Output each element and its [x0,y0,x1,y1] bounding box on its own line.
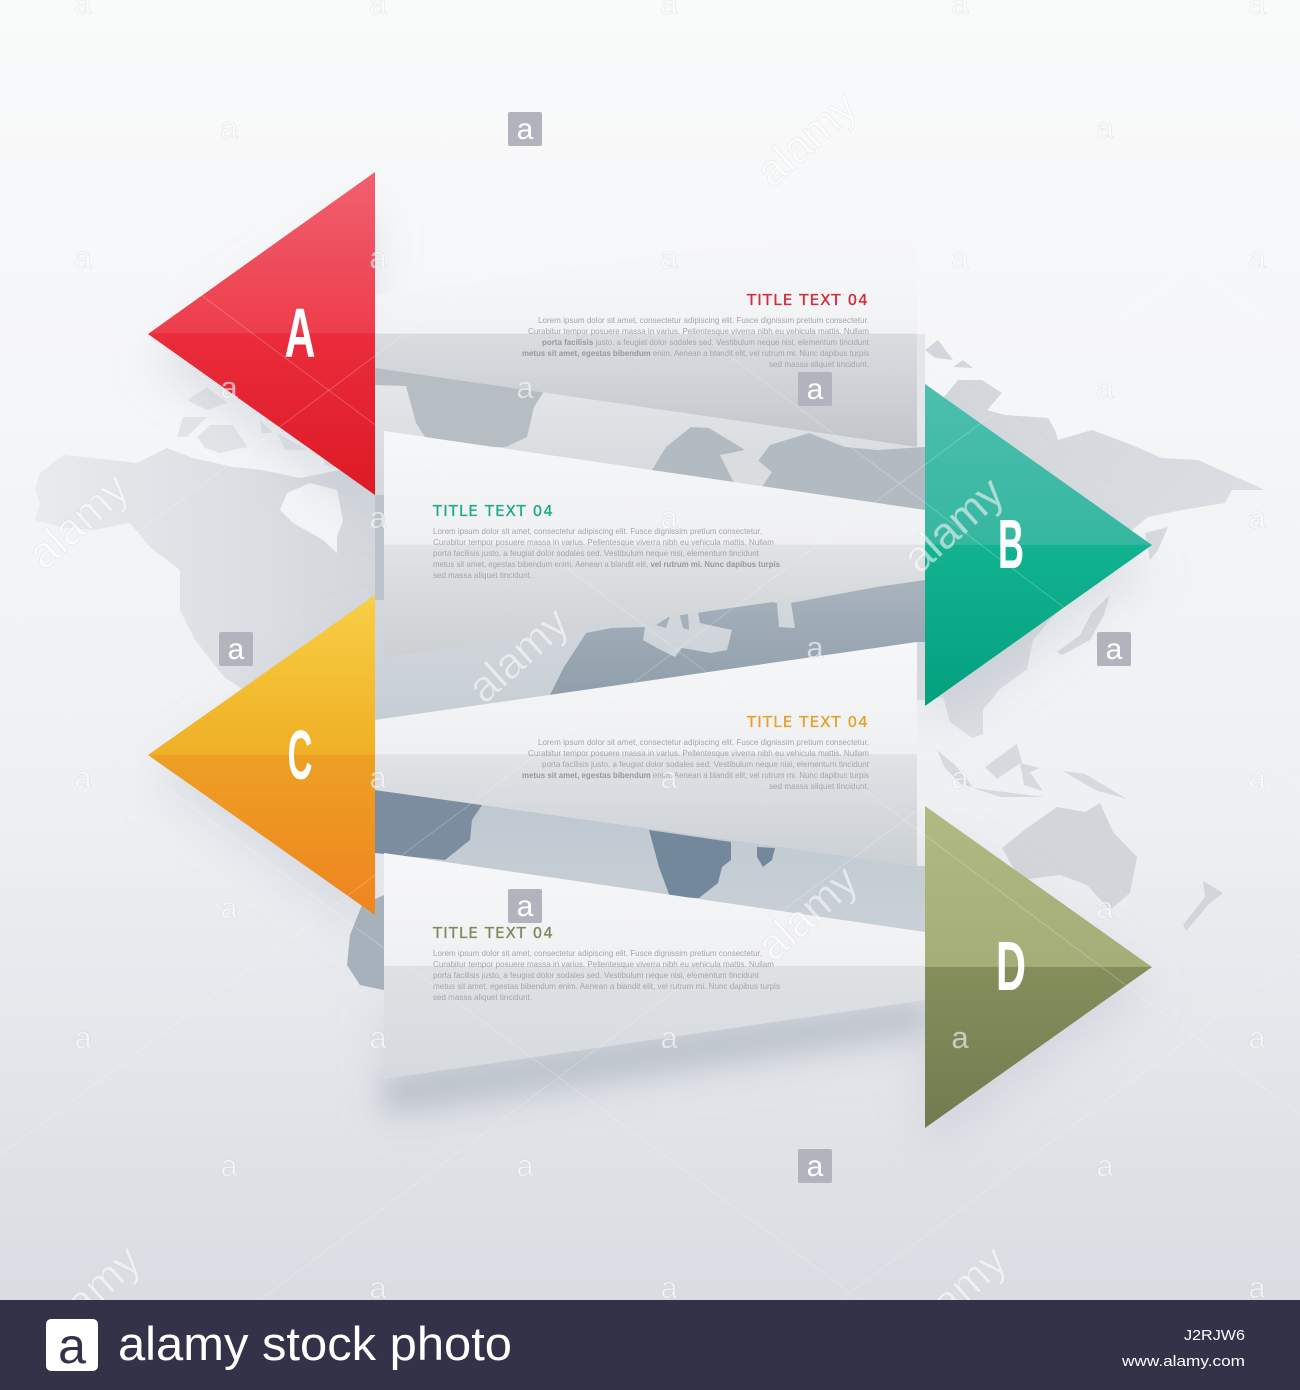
continent: Australia [1002,803,1223,931]
footer logo [46,1318,98,1374]
watermark lattice: a [807,373,824,406]
watermark lattice: alamy [458,598,578,713]
panel: C text banner [375,642,917,866]
arrow C [148,595,375,915]
body text C: Lorem ipsum dolor sit amet, consectetur adipiscing elit. Fusce dignissim pretium consectetur. [538,737,869,747]
title D: TITLE TEXT 04 [432,924,554,942]
watermark lattice: a [516,1148,534,1183]
body text C: metus sit amet, egestas bibendum enim. Aenean a blandit elit, vel rutrum mi. Nunc dapibus turpis [522,770,869,780]
watermark lattice: a [369,760,387,795]
watermark lattice: a [220,110,238,145]
watermark lattice: a [951,240,969,275]
arrow B: B [998,505,1024,583]
watermark lattice: alamy [893,468,1013,583]
watermark lattice: a [660,500,678,535]
watermark lattice: a [220,370,238,405]
footer bar [0,1300,1300,1390]
arrow A: A [284,294,316,372]
body text A: Lorem ipsum dolor sit amet, consectetur adipiscing elit. Fusce dignissim pretium consectetur. [538,315,869,325]
body text B: porta facilisis justo, a feugiat dolor sodales sed. Vestibulum neque nisi, elementum tincidunt [433,548,760,558]
title B: TITLE TEXT 04 [432,502,554,520]
watermark lattice: a [951,760,969,795]
watermark lattice: a [517,890,534,923]
panel: D text banner [384,853,925,1079]
footer brand name: alamy stock photo [118,1317,512,1370]
watermark lattice: a [1096,1148,1114,1183]
panel: A text banner [375,220,917,447]
watermark lattice: a [1248,1270,1266,1305]
watermark lattice: alamy [896,1236,1016,1351]
body text D: Lorem ipsum dolor sit amet, consectetur adipiscing elit. Fusce dignissim pretium consectetur. [433,948,762,958]
watermark lattice: a [660,240,678,275]
watermark lattice: alamy [746,82,866,197]
watermark lattice: a [220,890,238,925]
body text B: metus sit amet, egestas bibendum enim. Aenean a blandit elit, vel rutrum mi. Nunc dapibus turpis [433,559,780,569]
body text D [433,948,780,1002]
body text D: porta facilisis justo, a feugiat dolor sodales sed. Vestibulum neque nisi, elementum tincidunt [433,970,760,980]
body text D: metus sit amet, egestas bibendum enim. Aenean a blandit elit, vel rutrum mi. Nunc dapibus turpis [433,981,780,991]
body text C: sed massa aliquet tincidunt. [769,781,869,791]
watermark lattice: alamy [18,464,138,579]
body text A: Curabitur tempor posuere massa in varius. Pellentesque viverra nibh eu vehicula mattis. Nullam [528,326,869,336]
website: www.alamy.com [1121,1353,1245,1370]
watermark lattice: a [660,760,678,795]
watermark lattice: a [807,1150,824,1183]
watermark lattice: a [74,240,92,275]
watermark lattice: a [1248,240,1266,275]
watermark lattice: a [74,760,92,795]
watermark lattice: a [951,1020,969,1055]
watermark lattice: a [1248,1020,1266,1055]
body text A: porta facilisis justo, a feugiat dolor sodales sed. Vestibulum neque nisi, elementum tincidunt [542,337,870,347]
watermark lattice: a [806,630,824,665]
watermark lattice: alamy [747,856,867,971]
image id: J2RJW6 [1184,1327,1245,1344]
gaps between panels [375,334,925,1000]
panel: B text banner [384,431,925,658]
watermark lattice: a [660,1270,678,1305]
body text B: Curabitur tempor posuere massa in varius. Pellentesque viverra nibh eu vehicula mattis. Nullam [433,537,774,547]
arctic islands [177,387,375,475]
watermark lattice: a [1106,633,1123,666]
world map [35,340,1265,931]
body text A: sed massa aliquet tincidunt. [769,359,869,369]
watermark lattice: a [74,1020,92,1055]
body text C: porta facilisis justo, a feugiat dolor sodales sed. Vestibulum neque nisi, elementum tincidunt [542,759,870,769]
watermark lattice: a [369,1270,387,1305]
title A: TITLE TEXT 04 [746,291,869,309]
arrow A [148,172,375,495]
soft shadows behind panels and arrows [148,200,1152,1150]
map seen through the gaps [347,360,925,990]
arrow D [925,806,1152,1128]
watermark lattice: a [516,370,534,405]
body text C [522,737,870,791]
watermark lattice: a [369,240,387,275]
watermark lattice: a [1096,890,1114,925]
body text A: metus sit amet, egestas bibendum enim. Aenean a blandit elit, vel rutrum mi. Nunc dapibus turpis [522,348,869,358]
watermark lattice: a [369,1020,387,1055]
body text B: Lorem ipsum dolor sit amet, consectetur adipiscing elit. Fusce dignissim pretium consectetur. [433,526,762,536]
arrow D: D [996,927,1026,1005]
arrow B [925,384,1152,706]
body text A [522,315,870,369]
watermark lattice: a [220,1148,238,1183]
islands of east Asia [937,527,1168,799]
footer logo: a [58,1318,86,1374]
watermark lattice: a [228,633,245,666]
body text D: Curabitur tempor posuere massa in varius. Pellentesque viverra nibh eu vehicula mattis. Nullam [433,959,774,969]
continent: North America [35,448,375,693]
watermark lattice: a [369,500,387,535]
body text D: sed massa aliquet tincidunt. [433,992,532,1002]
title C: TITLE TEXT 04 [746,713,869,731]
watermark lattice: a [1248,760,1266,795]
watermark lattice: a [517,113,534,146]
watermark lattice: alamy [30,1236,150,1351]
soft shadow under the lowest panel [384,1000,925,1110]
watermark lattice: a [1248,500,1266,535]
watermark lattice: a [660,1020,678,1055]
continent: Asia and Europe [925,340,1265,738]
body text B: sed massa aliquet tincidunt. [433,570,532,580]
arrow C: C [288,716,312,794]
body text C: Curabitur tempor posuere massa in varius. Pellentesque viverra nibh eu vehicula mattis. Nullam [528,748,869,758]
body text B [433,526,780,580]
watermark lattice: a [1096,110,1114,145]
watermark lattice: a [1096,370,1114,405]
